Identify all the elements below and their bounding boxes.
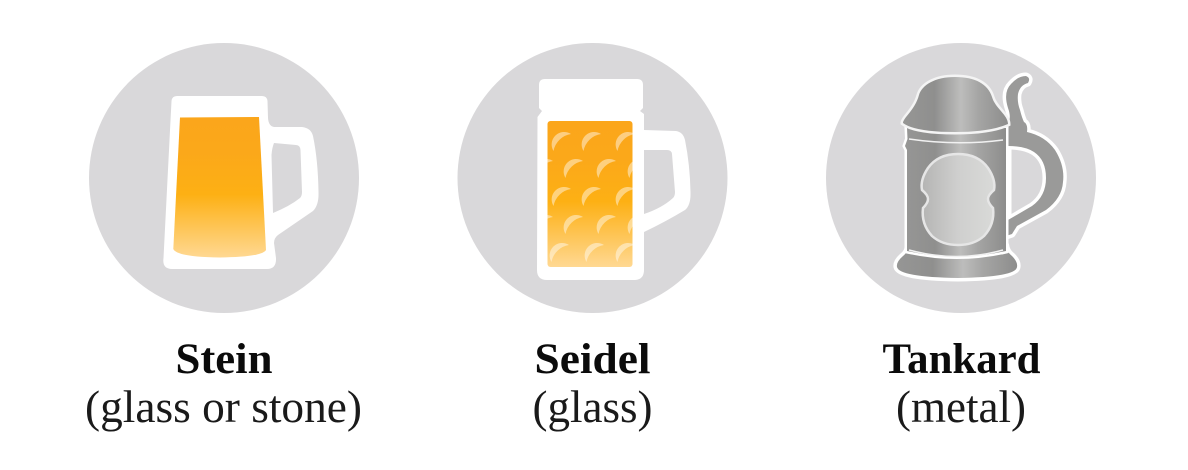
handle and thumb lift xyxy=(1004,76,1063,236)
lid xyxy=(903,77,1008,132)
beer fill xyxy=(173,117,266,258)
bubbles xyxy=(548,132,632,262)
panel: stein xyxy=(85,43,362,432)
icon: stein mug xyxy=(163,96,319,269)
beer fill xyxy=(548,121,632,267)
label: tankard: (metal) xyxy=(896,381,1026,432)
body rings xyxy=(909,139,1003,256)
panel: tankard xyxy=(826,43,1096,432)
body xyxy=(905,128,1006,256)
icon background: stein xyxy=(89,43,359,313)
label: stein: (glass or stone) xyxy=(85,381,362,432)
icon background: tankard xyxy=(826,43,1096,313)
icon: seidel mug xyxy=(534,79,691,280)
label: stein xyxy=(85,336,362,432)
engraved plate xyxy=(922,154,994,245)
label: tankard xyxy=(882,336,1041,432)
icon: tankard xyxy=(897,76,1063,278)
label: seidel: Seidel xyxy=(534,336,651,383)
infographic: drinking vessel types xyxy=(87,43,1096,432)
base xyxy=(897,247,1017,278)
label: seidel xyxy=(532,336,652,432)
label: stein: Stein xyxy=(176,336,273,383)
label: tankard: Tankard xyxy=(882,336,1041,383)
label: seidel: (glass) xyxy=(532,381,652,432)
panel: seidel xyxy=(458,43,728,432)
icon background: seidel xyxy=(458,43,728,313)
